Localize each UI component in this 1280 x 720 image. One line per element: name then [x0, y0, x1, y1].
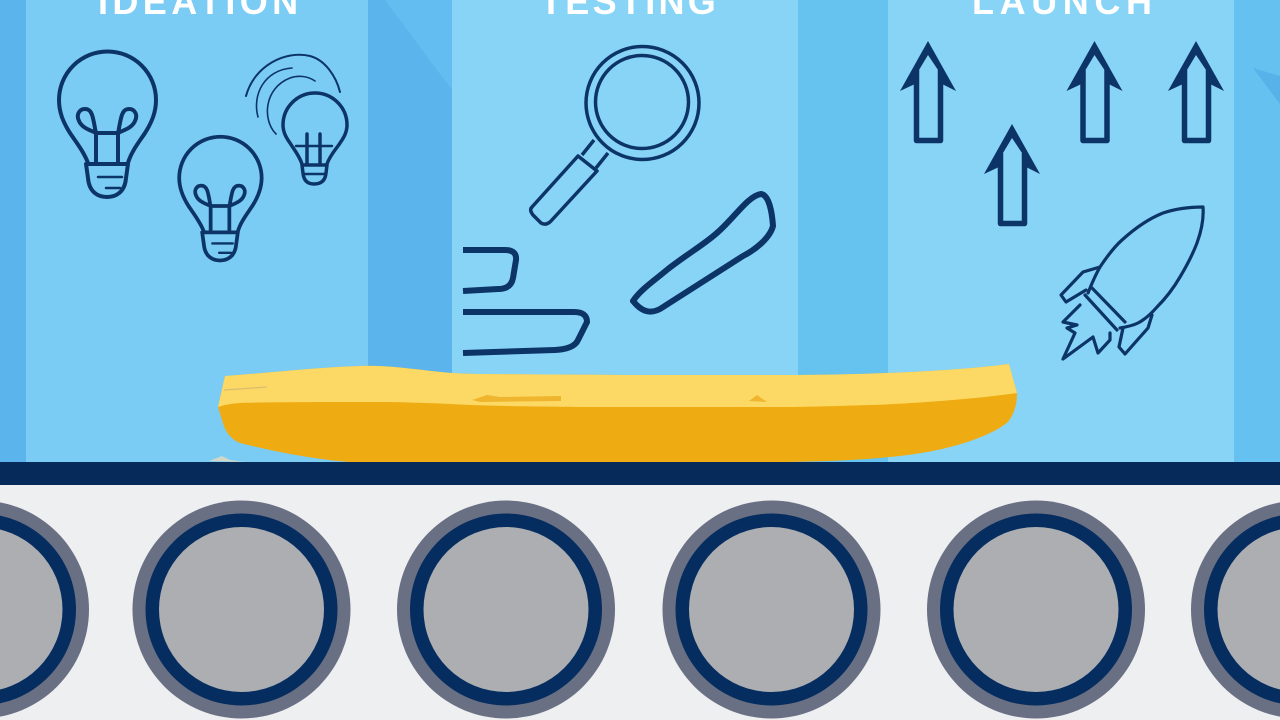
conveyor belt bar	[0, 462, 1280, 485]
wheel 1	[0, 500, 89, 718]
wheel 2	[132, 500, 350, 718]
icon: medium light bulb	[179, 137, 262, 260]
panel: launch	[888, 0, 1234, 462]
icon: magnifying glass	[531, 46, 699, 224]
icon: arrow one	[900, 41, 956, 140]
yellow board	[209, 364, 1017, 462]
icon: lower bracket stroke	[463, 312, 587, 353]
icon: arrow four	[984, 124, 1040, 224]
wheel 3	[397, 500, 615, 718]
wheel 4	[662, 500, 880, 718]
icon: curved blade	[633, 194, 773, 312]
panel: testing	[452, 0, 798, 462]
conveyor body	[0, 485, 1280, 720]
wheel 6	[1191, 500, 1280, 718]
icon: arrow three	[1168, 41, 1224, 140]
wheel 5	[927, 500, 1145, 718]
icon: large light bulb	[59, 51, 156, 197]
panel: ideation	[26, 0, 368, 462]
icon: arrow two	[1066, 41, 1122, 140]
icon: small light bulb with glow arcs	[246, 55, 347, 184]
icon: rocket	[1061, 207, 1203, 359]
icon: upper bracket stroke	[463, 250, 516, 291]
